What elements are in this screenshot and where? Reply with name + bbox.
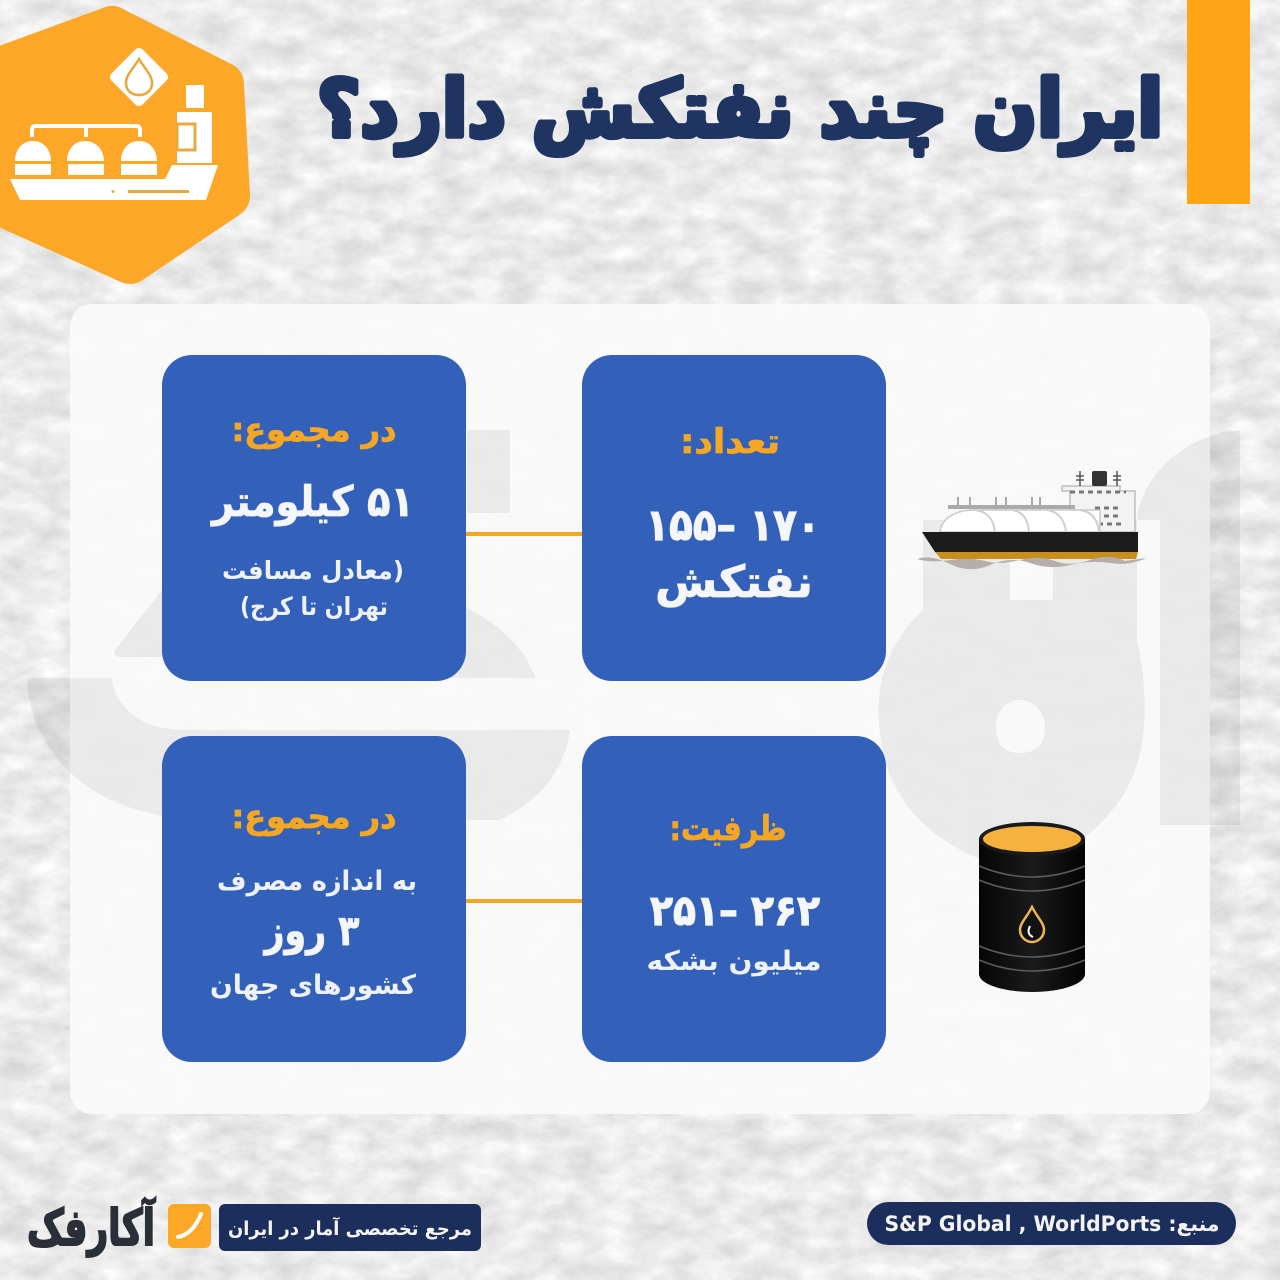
- note: distance comparison: تهران تا کرج): [240, 592, 388, 622]
- card: capacity: [582, 736, 886, 1062]
- value label: tankers: نفتکش: [655, 557, 813, 608]
- card: total length: [162, 355, 466, 681]
- note: distance comparison: [222, 556, 404, 622]
- value label: million barrels: میلیون بشکه: [646, 946, 822, 977]
- value: capacity range: ۲۶۲ –۲۵۱: [650, 886, 820, 935]
- icon: LNG tanker ship: [917, 471, 1146, 569]
- icon: hexagon tanker badge: [0, 28, 228, 262]
- icon: oil drop diamond: [108, 46, 170, 108]
- source pill: منبع: S&P Global , WorldPorts: [884, 1212, 1220, 1236]
- source pill: [867, 1202, 1236, 1245]
- card: total consumption: [162, 736, 466, 1062]
- value: 51 km: ۵۱ کیلومتر: [210, 477, 414, 527]
- connector: top row: [466, 532, 582, 536]
- connector: bottom row: [466, 899, 582, 903]
- panel: main white card: [70, 304, 1210, 1114]
- icon: tanker silhouette: [10, 85, 218, 200]
- tagline pill: مرجع تخصصی آمار در ایران: [228, 1216, 472, 1240]
- card heading: capacity: ظرفیت:: [670, 809, 786, 849]
- icon: oil barrel: [979, 822, 1085, 992]
- accent bar: top right: [1187, 0, 1250, 204]
- value: 3 days: ۳ روز: [263, 906, 360, 956]
- card heading: total: در مجموع:: [232, 797, 396, 837]
- card heading: total: در مجموع:: [232, 410, 396, 450]
- text: consumption equivalent: به اندازه مصرف: [217, 866, 417, 897]
- text: world countries: کشورهای جهان: [210, 970, 416, 1001]
- value: tanker count: ۱۷۰ –۱۵۵: [646, 500, 820, 551]
- card heading: count: تعداد:: [680, 422, 780, 462]
- watermark logo: [27, 430, 1240, 870]
- logo: brand wordmark: آکارفک: [27, 1197, 156, 1257]
- title: ایران چند نفتکش دارد؟: [317, 65, 1163, 155]
- tagline pill: [219, 1204, 481, 1251]
- note: distance comparison: (معادل مسافت: [222, 556, 404, 585]
- logo: orange mark: [168, 1204, 211, 1248]
- card: count: [582, 355, 886, 681]
